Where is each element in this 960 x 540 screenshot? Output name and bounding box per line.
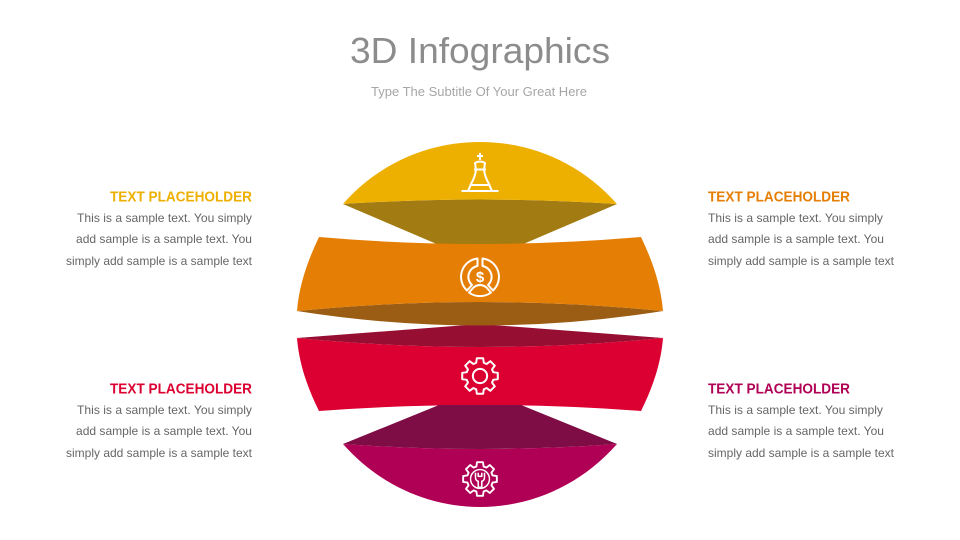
panel: top right text block bbox=[708, 190, 895, 268]
icon: dollar pie: $ bbox=[476, 269, 485, 286]
icon: dollar pie bbox=[461, 258, 499, 296]
panel: bottom right text block: add sample is a sample text. You bbox=[708, 424, 884, 438]
panel: top right text block: This is a sample text. You simply bbox=[708, 211, 883, 225]
panel: bottom left text block: This is a sample text. You simply bbox=[77, 403, 252, 417]
panel: top left text block: add sample is a sample text. You bbox=[76, 232, 252, 246]
sphere slice: dark red underside bbox=[297, 324, 663, 347]
panel: bottom left text block: add sample is a sample text. You bbox=[76, 424, 252, 438]
panel: top right text block: add sample is a sample text. You bbox=[708, 232, 884, 246]
panel: bottom left text block bbox=[66, 382, 253, 460]
sphere slice: red band bbox=[297, 338, 663, 411]
subtitle: Type The Subtitle Of Your Great Here bbox=[371, 85, 587, 99]
panel: top left text block: This is a sample text. You simply bbox=[77, 211, 252, 225]
panel: top left text block bbox=[66, 190, 253, 268]
panel: top right text block: simply add sample is a sample text bbox=[708, 254, 895, 268]
panel: top right text block: TEXT PLACEHOLDER bbox=[708, 190, 850, 206]
panel: bottom left text block: simply add sample is a sample text bbox=[66, 446, 253, 460]
panel: top left text block: simply add sample is a sample text bbox=[66, 254, 253, 268]
panel: bottom right text block bbox=[708, 382, 895, 460]
sphere slice: orange band bbox=[297, 237, 663, 326]
icon: gear bbox=[462, 358, 498, 394]
panel: top left text block: TEXT PLACEHOLDER bbox=[110, 190, 252, 206]
sphere slice: yellow cap bbox=[343, 142, 617, 245]
icon: chess king bbox=[462, 153, 498, 191]
panel: bottom right text block: simply add sample is a sample text bbox=[708, 446, 895, 460]
panel: bottom left text block: TEXT PLACEHOLDER bbox=[110, 382, 252, 398]
title: 3D Infographics bbox=[350, 30, 610, 71]
sphere slice: plum cap bbox=[343, 405, 617, 507]
panel: bottom right text block: This is a sample text. You simply bbox=[708, 403, 883, 417]
panel: bottom right text block: TEXT PLACEHOLDER bbox=[708, 382, 850, 398]
icon: wrench gear bbox=[463, 462, 497, 496]
